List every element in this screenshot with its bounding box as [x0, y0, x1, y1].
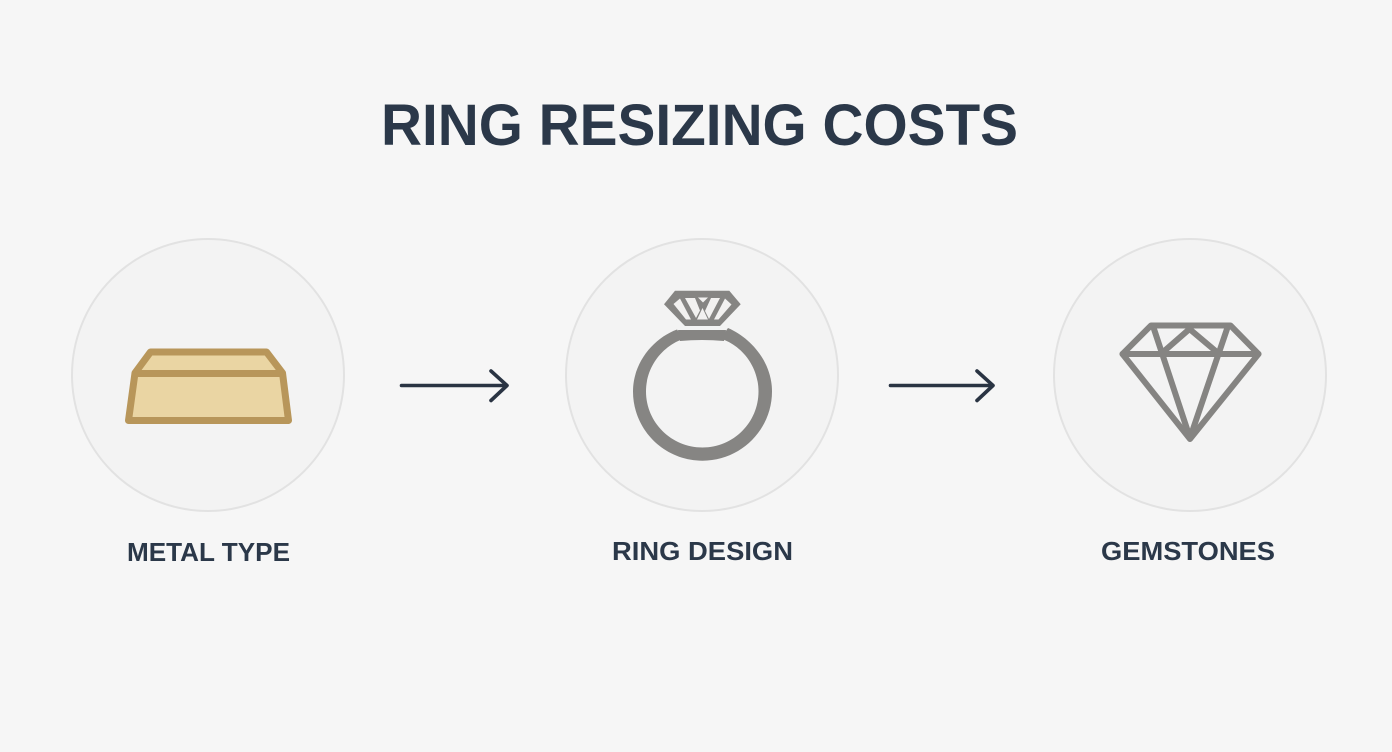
- icon: ring: [633, 291, 772, 461]
- arrow: ring design to gemstones: [890, 371, 993, 400]
- gemstones circle: [1054, 239, 1326, 511]
- icon: gold bar: [128, 352, 288, 420]
- arrow: metal type to ring design: [402, 371, 507, 400]
- label: ring design: RING DESIGN: [612, 536, 793, 566]
- label: metal type: METAL TYPE: [127, 537, 290, 567]
- title: RING RESIZING COSTS: [381, 93, 1018, 158]
- icon: diamond: [1122, 326, 1258, 439]
- panel: gemstones: [1054, 239, 1326, 566]
- panel: ring design: [566, 239, 838, 566]
- ring band: [633, 328, 772, 461]
- metal type circle: [72, 239, 344, 511]
- ring design circle: [566, 239, 838, 511]
- panel: metal type: [72, 239, 344, 567]
- label: gemstones: GEMSTONES: [1101, 536, 1275, 566]
- ring gemstone: [664, 291, 741, 326]
